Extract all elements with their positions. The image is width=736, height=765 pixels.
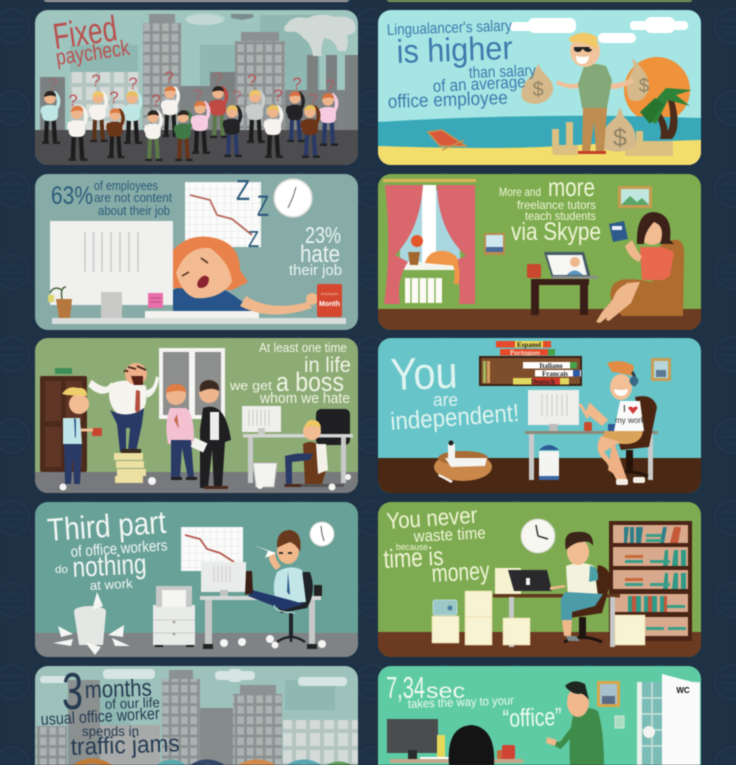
man sitting on the floor	[285, 420, 328, 487]
freelancer with headset: my work	[615, 416, 646, 425]
heading: 7,34 sec: “office”	[502, 703, 562, 733]
heading: via Skype	[499, 182, 601, 246]
question marks: ?	[91, 71, 101, 90]
lazy employee with paper plane	[245, 530, 306, 613]
heading: three months traffic jams	[40, 663, 180, 761]
chart on wall	[185, 182, 261, 247]
sleeping woman	[173, 236, 318, 315]
city buildings	[36, 670, 358, 765]
overflowing waste bin	[53, 592, 130, 655]
crumpled papers	[220, 635, 326, 648]
question marks: ?	[308, 90, 318, 109]
heading: third part do nothing: Third part	[46, 504, 167, 548]
heading: salary text: than salary	[469, 63, 536, 82]
clouds	[510, 17, 688, 43]
snoring Z letters: Z	[248, 226, 259, 252]
question marks: ?	[109, 88, 119, 107]
bookcase	[609, 521, 692, 641]
freelancer with headset	[580, 361, 646, 485]
crumpled papers	[60, 474, 351, 490]
bathroom door with WC sign	[637, 674, 700, 765]
language books shelf: Deutsch	[531, 378, 555, 386]
table, laptop and mug	[527, 252, 598, 315]
heading: third part do nothing: do	[55, 564, 68, 576]
language books shelf	[479, 341, 582, 386]
office desk with monitor and bin	[242, 406, 353, 487]
heading: 63 percent: are not content	[94, 191, 172, 205]
panel: third part do nothing	[35, 502, 358, 657]
heading: 63 percent: about their job	[98, 204, 170, 218]
panel: three months in traffic	[35, 663, 358, 765]
language books shelf: Espanol	[517, 341, 541, 349]
door with exit sign	[40, 368, 87, 472]
man in pink shirt	[166, 384, 197, 480]
employee of the month mug	[317, 284, 342, 317]
question marks: ?	[48, 75, 58, 94]
question marks: ?	[232, 87, 242, 106]
question marks: ?	[273, 86, 283, 105]
clouds	[40, 669, 347, 686]
man in black jacket	[191, 380, 231, 489]
angry boss	[90, 363, 159, 453]
office chair	[273, 572, 313, 642]
question marks	[49, 71, 334, 107]
icon: potted plant	[48, 287, 72, 318]
snoring Z letters	[236, 175, 269, 252]
panel: you are independent	[378, 338, 701, 493]
question marks: ?	[128, 74, 138, 93]
heading: via Skype: teach students	[525, 209, 596, 223]
tutor woman	[596, 212, 674, 323]
question marks: ?	[325, 76, 335, 95]
heading: three months traffic jams: of our life	[105, 694, 160, 712]
paper stacks	[432, 591, 645, 645]
heading: three months traffic jams: usual office worker	[40, 705, 160, 729]
coin stacks and money bags	[521, 58, 673, 156]
heading: salary text: office employee	[387, 88, 508, 113]
armchair	[610, 240, 684, 316]
panel: salary is higher: $	[532, 79, 544, 101]
heading: a boss we hate: we get	[229, 378, 272, 393]
heading: third part do nothing: at work	[89, 576, 134, 593]
heading: salary text: Lingualancer's salary	[387, 18, 512, 39]
panel: the way to your office	[378, 666, 701, 765]
panel: salary is higher	[378, 10, 701, 165]
heading: third part do nothing: of office workers	[70, 537, 168, 561]
computer monitor back	[50, 221, 173, 318]
window	[159, 348, 225, 419]
language books shelf: Italiano	[539, 362, 563, 370]
heading: three months traffic jams: 3	[62, 663, 83, 721]
heading: Fixed paycheck: paycheck	[54, 35, 132, 70]
R2 robot trash can	[539, 445, 559, 480]
factory smoke	[284, 15, 356, 56]
heading: via Skype: via Skype	[511, 218, 601, 246]
heading: third part do nothing: nothing	[72, 548, 147, 583]
heading: 63 percent: 63%	[51, 182, 93, 210]
heading: a boss we hate: in life	[304, 354, 351, 377]
heading: time is money: time is	[383, 541, 444, 574]
desk with monitor and chair	[387, 719, 523, 765]
heading: time is money: money	[431, 557, 491, 588]
man in green pyjamas	[546, 681, 604, 765]
snoring Z letters: Z	[257, 190, 269, 223]
man at laptop	[550, 532, 603, 641]
employee of the month mug: employee	[321, 291, 339, 296]
heading: three months traffic jams: spends in	[82, 723, 139, 739]
heading: salary text	[387, 18, 536, 113]
icon: sun	[624, 57, 690, 123]
heading: via Skype: More and	[499, 185, 541, 199]
heading: third part do nothing	[46, 504, 168, 593]
heading: 7,34 sec	[386, 670, 562, 733]
bathroom door with WC sign: WC	[676, 686, 690, 695]
question marks: ?	[247, 71, 257, 90]
heading: Fixed paycheck	[53, 14, 130, 70]
panel: a boss we hate	[35, 338, 358, 493]
city buildings	[40, 14, 358, 130]
heading: 63 percent: of employees	[94, 179, 158, 193]
picture frames	[484, 186, 652, 255]
desk with laptop	[493, 568, 620, 647]
heading: you are independent: are	[433, 390, 458, 410]
heading: 7,34 sec: 7,34	[386, 670, 425, 705]
picture frame	[651, 358, 671, 381]
dog in basket	[434, 440, 492, 483]
filing cabinet with printer	[153, 586, 195, 647]
question marks: ?	[193, 86, 203, 105]
heading: a boss we hate: a boss	[276, 367, 344, 397]
crowd of confused employees	[42, 86, 338, 161]
employee of the month mug: Month	[319, 301, 340, 308]
chart on wall	[181, 527, 243, 571]
heading: a boss we hate: whom we hate	[259, 391, 350, 407]
panel: 63 percent not content	[35, 174, 358, 330]
text: 23 percent hate their job: their job	[289, 262, 342, 279]
cars in traffic jam	[68, 761, 356, 765]
heading: you are independent: You	[390, 347, 458, 400]
panel: fixed paycheck	[35, 7, 358, 165]
heading: three months traffic jams: months	[84, 675, 152, 704]
heading: salary text: is higher	[396, 29, 513, 70]
pen cup	[314, 585, 322, 596]
panel: never waste time	[378, 502, 701, 657]
heading: a boss we hate: At least one time	[259, 341, 347, 355]
heading: you are independent	[389, 347, 520, 436]
heading: three months traffic jams: traffic jams	[70, 730, 180, 761]
chair	[564, 565, 610, 642]
question marks: ?	[213, 69, 223, 88]
language books shelf: Portugues	[510, 349, 540, 357]
heading: via Skype: freelance tutors	[517, 198, 596, 212]
happy man with sunglasses	[556, 33, 634, 154]
heading: a boss we hate	[229, 341, 351, 407]
icon: palm tree	[640, 88, 692, 139]
aquarium	[433, 600, 457, 615]
beach chair	[428, 130, 466, 150]
heading: you are independent: independent!	[389, 399, 520, 436]
heading: 63 percent	[51, 179, 172, 218]
freelancer with headset: I	[623, 404, 626, 415]
language books shelf: Francais	[542, 370, 568, 378]
picture frame	[597, 681, 620, 707]
text: 23 percent hate their job: hate	[300, 241, 340, 268]
stack of books	[114, 453, 146, 483]
heading: Fixed paycheck: Fixed	[50, 7, 119, 57]
chair	[612, 396, 657, 476]
text: 23 percent hate their job: 23%	[305, 222, 341, 248]
snoring Z letters: Z	[236, 175, 250, 207]
panel: tutors via Skype	[378, 172, 701, 330]
icon: clock	[310, 522, 334, 546]
heading: 7,34 sec: sec	[426, 680, 465, 703]
young man with mug	[62, 387, 102, 484]
icon: clock	[521, 519, 555, 553]
icon: clock	[274, 179, 312, 217]
heading: via Skype: more	[548, 172, 595, 202]
heading: 7,34 sec: takes the way to your	[408, 693, 514, 711]
heading: salary text: of an average	[432, 72, 526, 96]
window with curtains and cat	[383, 179, 476, 304]
question marks: ?	[151, 91, 161, 110]
heading: time is money: because	[396, 542, 428, 552]
question marks: ?	[68, 91, 78, 110]
text: 23 percent hate their job	[289, 222, 342, 279]
heading: time is money: waste time	[412, 524, 486, 546]
desk with monitor	[525, 390, 658, 480]
question marks: ?	[292, 74, 302, 93]
heading: time is money	[383, 502, 491, 588]
question marks: ?	[164, 68, 174, 87]
panel: salary is higher: $	[639, 76, 650, 97]
panel: salary is higher: $	[613, 124, 627, 152]
desk with monitor	[200, 562, 321, 649]
heading: time is money: You never	[386, 502, 478, 534]
